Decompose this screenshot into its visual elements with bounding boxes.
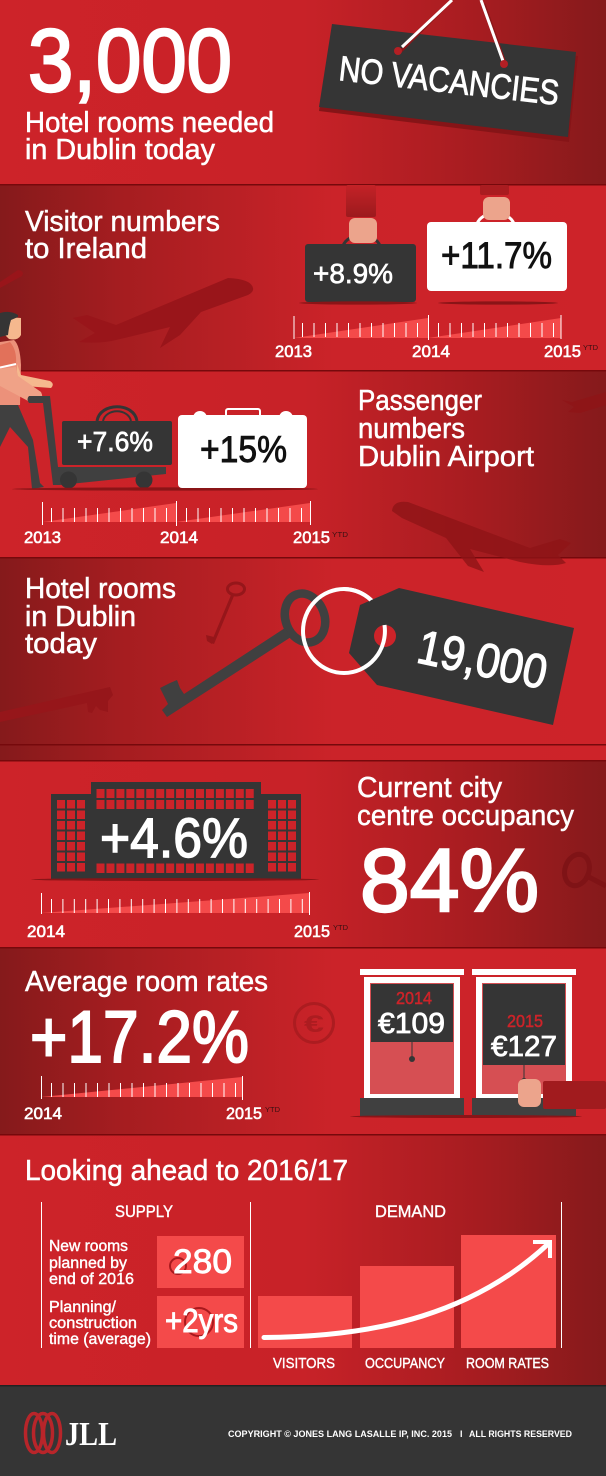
headline caption: in Dublin today [25,134,216,166]
trolley [28,396,166,488]
heading [25,206,220,265]
stat: planning time: Planning/ [49,1299,117,1316]
timeline 2014-2015: 2015 [294,923,330,941]
stat: new rooms [49,1236,244,1288]
timeline 2013-2015: 2015 [293,529,330,547]
panel: hotel rooms in Dublin today [0,573,574,725]
copyright: COPYRIGHT © JONES LANG LASALLE IP, INC. 2015 [228,1429,452,1439]
occupancy value: 84% [360,830,539,930]
timeline 2013-2015 [24,501,348,547]
icon: no vacancies sign: NO VACANCIES [337,49,561,113]
icon: dark suitcase: +7.6% [77,426,153,457]
stat: new rooms: New rooms [49,1238,128,1255]
timeline 2014-2015 [27,892,348,941]
timeline 2013-2015: 2014 [160,529,198,547]
headline number: 3,000 [28,10,232,110]
stat: new rooms: planned by [49,1255,127,1272]
stat: planning time: +2yrs [165,1302,238,1339]
icon: white suitcase [178,409,307,488]
icon: dark case with hand: +8.9% [313,258,393,289]
timeline 2013-2015: 2013 [275,343,312,361]
icon: dark case with hand [299,185,417,305]
timeline 2013-2015 [275,315,598,361]
supply column: SUPPLY [115,1202,173,1221]
heading: Passenger [358,385,482,417]
heading [358,385,534,473]
panel: average room rates [24,966,606,1123]
icon: hotel building [31,782,319,881]
icon: man pushing trolley [0,312,318,491]
icon: door 2014: 2014 [396,988,432,1008]
panel: looking ahead [25,1155,562,1372]
heading: Dublin Airport [358,441,534,473]
timeline 2014-2015: YTD [333,925,348,932]
stat: planning time: time (average) [49,1331,151,1348]
timeline 2014-2015: 2014 [24,1105,62,1123]
icon: background key [561,851,606,889]
stat: new rooms: end of 2016 [49,1271,134,1288]
demand chart: ROOM RATES [466,1356,549,1372]
panel: 3,000 hotel rooms needed [25,10,274,166]
timeline 2013-2015: 2014 [412,343,450,361]
timeline 2013-2015: YTD [583,345,598,352]
icon: white case with hand: +11.7% [441,235,552,276]
arrow [264,1242,550,1338]
icon: hotel building: +4.6% [100,806,248,869]
demand chart: VISITORS [273,1356,335,1372]
icon: door 2015 with hand: 2015 [507,1011,543,1031]
icon: price tag: 19,000 [413,621,552,700]
copyright: ALL RIGHTS RESERVED [469,1429,572,1439]
demand chart: OCCUPANCY [365,1356,445,1372]
stat: planning time: construction [49,1315,137,1332]
icon: background keys [0,583,244,722]
timeline 2014-2015: 2015 [226,1105,262,1123]
icon: white suitcase: +15% [200,429,287,470]
heading: today [25,628,98,660]
heading: Current city [357,772,503,804]
headline caption: Hotel rooms needed [25,107,274,139]
panel: passenger numbers Dublin Airport [24,385,606,572]
heading: in Dublin [25,601,136,633]
icon: no vacancies sign [319,0,578,142]
heading: to Ireland [25,233,147,265]
icon: dark suitcase [62,407,172,465]
icon: door 2014: €109 [378,1008,445,1040]
demand chart [258,1202,556,1372]
timeline 2014-2015: YTD [265,1107,280,1114]
heading [25,573,176,660]
icon: door 2015 with hand: €127 [491,1031,557,1063]
icon: euro coin [294,1004,334,1042]
copyright: I [460,1429,463,1439]
timeline 2013-2015: YTD [332,532,348,539]
icon: euro coin: € [304,1011,324,1038]
footer [0,1385,606,1476]
timeline 2013-2015: 2013 [24,529,61,547]
panel: visitor numbers to Ireland [0,185,598,361]
floor shadow [350,1115,582,1118]
stat: planning time [49,1296,244,1348]
timeline 2013-2015: 2015 [544,343,581,361]
rate value: +17.2% [30,997,249,1078]
panel: current city centre occupancy [27,772,606,941]
icon: plane silhouettes [392,392,606,572]
heading: Looking ahead to 2016/17 [25,1155,348,1187]
timeline 2014-2015: 2014 [27,923,65,941]
man [0,312,53,489]
supply column [49,1202,244,1348]
icon: plane silhouette [0,270,253,348]
demand chart: DEMAND [375,1202,446,1221]
heading: Visitor numbers [25,206,220,238]
heading: numbers [358,413,465,445]
heading: Average room rates [25,966,268,998]
heading: Hotel rooms [25,573,176,605]
icon: price tag [303,588,574,725]
icon: door 2015 with hand [472,969,606,1116]
icon: white case with hand [427,185,567,305]
logo wordmark: JLL [65,1416,117,1453]
icon: JLL logo rings [26,1414,60,1452]
icon: key [160,588,332,717]
copyright [228,1429,572,1439]
timeline 2014-2015 [24,1076,280,1123]
icon: door 2014 [360,969,464,1116]
stat: new rooms: 280 [173,1243,232,1281]
heading [357,772,575,832]
heading: centre occupancy [357,800,575,832]
headline caption [25,107,274,166]
